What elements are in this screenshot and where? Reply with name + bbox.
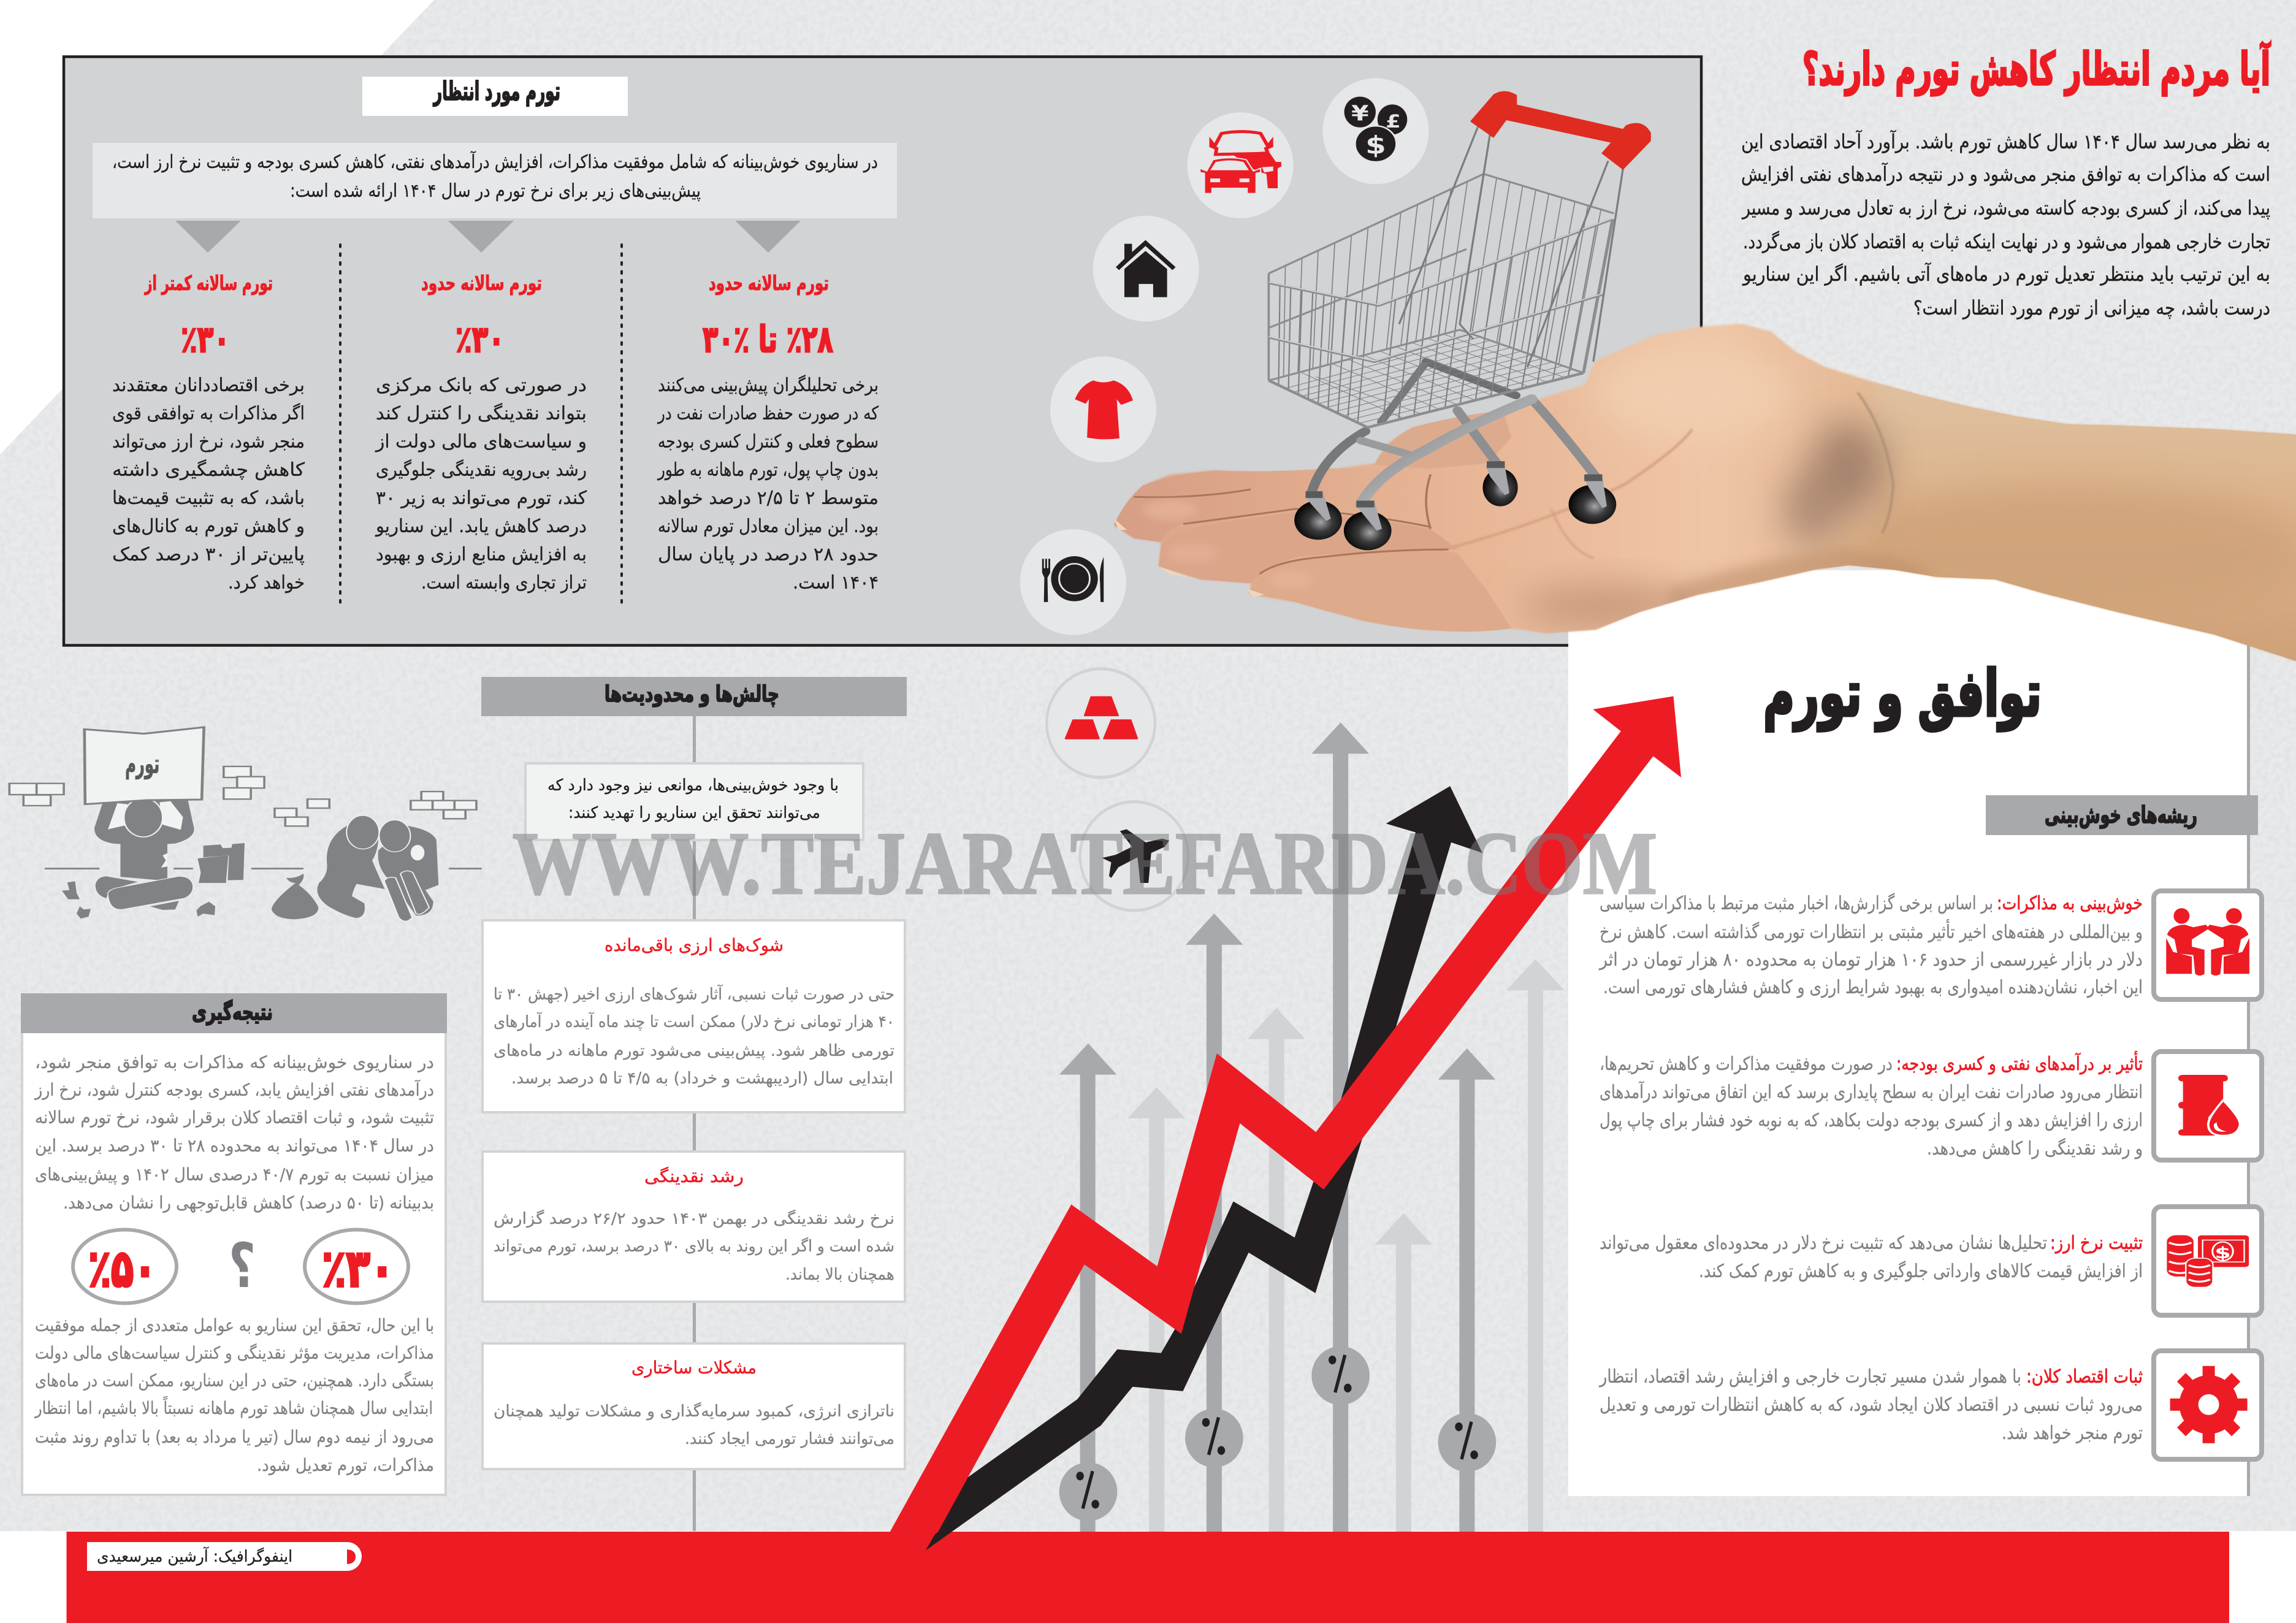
column: 28 to 30 percent: حدود ۲۸ درصد در پایان سال: [658, 544, 879, 565]
column: below 30 percent: تورم سالانه کمتر از: [144, 271, 273, 296]
bricks: [9, 766, 476, 826]
panel: expected inflation: [64, 56, 1701, 645]
section: challenges and limits: [481, 677, 907, 1531]
column: below 30 percent: پایین‌تر از ۳۰ درصد کمک: [112, 544, 305, 565]
column: below 30 percent: و کاهش تورم به کانال‌های: [112, 516, 305, 537]
section heading: [481, 677, 907, 716]
section intro box: با وجود خوش‌بینی‌ها، موانعی نیز وجود دارد که: [547, 776, 839, 795]
trash bag: [272, 874, 318, 919]
item: negotiation optimism: بر اساس برخی گزارش‌ها، اخبار مثبت مرتبط با مذاکرات سیاسی: [1600, 893, 1993, 914]
intro paragraph: [1741, 129, 2270, 319]
card: currency shocks: تورمی ظاهر شود. پیش‌بینی می‌شود تورم ماهانه در ماه‌های: [494, 1042, 894, 1060]
paragraph: conclusion first part: میزان نسبت به تورم ۴۰/۷ درصدی سال ۱۴۰۲ و پیش‌بینی‌های: [35, 1164, 434, 1185]
main title: deal and inflation: توافق و تورم: [1763, 656, 2042, 731]
card: currency shocks: شوک‌های ارزی باقی‌مانده: [605, 935, 784, 955]
red arrow: [880, 697, 1681, 1549]
paragraph: conclusion second part: [34, 1315, 434, 1475]
paragraph: conclusion first part: [34, 1052, 434, 1213]
item: macroeconomic stability: می‌رود ثبات نسبی در اقتصاد کلان ایجاد شود، که به کاهش انتظارات تورمی و تعدیل: [1600, 1394, 2143, 1416]
paragraph: conclusion first part: درآمدهای نفتی افزایش یابد، کسری بودجه کنترل شود، نرخ ارز: [34, 1080, 434, 1100]
section intro box: می‌توانند تحقق این سناریو را تهدید کنند:: [568, 804, 820, 822]
column: below 30 percent: کاهش چشمگیری داشته: [112, 459, 305, 481]
item: macroeconomic stability: تورم منجر خواهد شد.: [2002, 1423, 2143, 1444]
card: currency shocks: ابتدایی سال (اردیبهشت و خرداد) به ۴/۵ تا ۵ درصد برسد.: [511, 1069, 893, 1088]
paragraph: conclusion first part: تثبیت شود، و ثبات اقتصاد کلان برقرار شود، نرخ تورم سالانه: [35, 1107, 434, 1128]
icon card: coins and banknote: [2154, 1207, 2262, 1315]
item: negotiation optimism: دلار در بازار غیررسمی از حدود ۱۰۶ هزار تومان به محدوده ۸۰ هزار تومان در اثر: [1598, 949, 2143, 971]
section heading: چالش‌ها و محدودیت‌ها: [605, 682, 779, 707]
section heading: ریشه‌های خوش‌بینی: [2045, 801, 2197, 828]
cart wheels: [1294, 461, 1616, 550]
column: 28 to 30 percent: برخی تحلیلگران پیش‌بینی می‌کنند: [658, 375, 879, 396]
icon card: gear: [2154, 1351, 2262, 1459]
paragraph: conclusion second part: مذاکرات، مدیریت مؤثر نقدینگی و کنترل سیاست‌های مالی دولت: [35, 1343, 434, 1363]
intro text box: در سناریوی خوش‌بینانه که شامل موفقیت مذاکرات، افزایش درآمدهای نفتی، کاهش کسری بودجه و تثبیت نرخ ارز است،: [112, 151, 878, 173]
column: about 30 percent: تراز تجاری وابسته است.: [421, 572, 587, 594]
callout: 50 percent: [73, 1230, 177, 1304]
sign: [85, 727, 204, 804]
top-right intro: headline and text: [1741, 41, 2271, 319]
fingers: [1114, 411, 1511, 632]
card: structural problems: [482, 1343, 905, 1469]
column: 28 to 30 percent: سطوح فعلی و کنترل کسری بودجه: [658, 431, 879, 453]
credit pill: [87, 1542, 362, 1571]
section intro box: [525, 763, 863, 840]
column: about 30 percent: بتواند نقدینگی را کنترل کند: [376, 403, 587, 424]
column: below 30 percent: ٪۳۰: [181, 318, 230, 361]
cart undercarriage: [1311, 362, 1597, 505]
card: structural problems: می‌توانند فشار تورمی ایجاد کنند.: [685, 1430, 894, 1448]
intro paragraph: به نظر می‌رسد سال ۱۴۰۴ سال کاهش تورم باشد. برآورد آحاد اقتصادی این: [1741, 129, 2270, 153]
white section background: deal and inflation: [1568, 570, 2250, 1496]
shopping cart: [1268, 91, 1651, 550]
intro text box: [93, 143, 897, 218]
icon: shirt: [1050, 356, 1156, 462]
icon: gold bars: [1047, 669, 1155, 777]
pointer triangles: [175, 221, 801, 253]
column: 28 to 30 percent: بود. این میزان معادل تورم سالانه: [658, 516, 879, 537]
item: oil revenue and budget deficit: در صورت موفقیت مذاکرات و کاهش تحریم‌ها،: [1600, 1053, 1893, 1075]
item: macroeconomic stability: ثبات اقتصاد کلان:: [2026, 1366, 2143, 1388]
card: structural problems: ناترازی انرژی، کمبود سرمایه‌گذاری و مشکلات تولید همچنان: [494, 1402, 894, 1421]
question mark: ؟: [229, 1230, 256, 1302]
callout: 50 percent: ٪۵۰: [88, 1239, 156, 1299]
credit pill: اینفوگرافیک: آرشین میرسعیدی: [97, 1546, 292, 1566]
seated figure holding sign: [62, 798, 245, 918]
card: liquidity growth: رشد نقدینگی: [644, 1166, 744, 1186]
column: below 30 percent: خواهد کرد.: [228, 572, 305, 594]
icon: currency coins: $: [1365, 131, 1386, 160]
item: oil revenue and budget deficit: ارزی را افزایش دهد و از کسری بودجه دولت بکاهد، که به نوبه خود فشار برای چاپ پول: [1600, 1110, 2143, 1131]
paragraph: conclusion second part: ابتدایی سال همچنان شاهد تورم ماهانه نسبتاً بالا باشیم، اما انتظار: [34, 1396, 433, 1418]
item: negotiation optimism: خوش‌بینی به مذاکرات:: [1997, 893, 2143, 914]
cart basket wires: [1268, 127, 1623, 427]
column: below 30 percent: باشد، که به تثبیت قیمت‌ها: [112, 487, 305, 509]
column: below 30 percent: منجر شود، نرخ ارز می‌تواند: [112, 431, 305, 453]
item: negotiation optimism: و بین‌المللی در هفته‌های اخیر تأثیر مثبتی بر انتظارات تورمی گذاشته است. کاهش نرخ: [1600, 918, 2143, 943]
column: 28 to 30 percent: [657, 271, 879, 594]
paragraph: conclusion second part: با این حال، تحقق این سناریو به عوامل متعددی از جمله موفقیت: [35, 1315, 434, 1335]
percent badges: [1059, 1346, 1496, 1521]
column: about 30 percent: رشد بی‌رویه نقدینگی جلوگیری: [376, 459, 587, 481]
gray rising arrows chart background: [1047, 669, 1565, 1532]
illustration: people affected by inflation: [9, 727, 482, 921]
paragraph: conclusion first part: در سال ۱۴۰۴ می‌تواند به محدوده ۲۸ تا ۳۰ درصد برسد. این: [35, 1136, 434, 1156]
section: conclusion: [21, 993, 447, 1495]
light arrows: [1127, 959, 1565, 1532]
column: about 30 percent: و سیاست‌های مالی دولت از: [375, 431, 587, 453]
icon: currency coins: [1322, 78, 1428, 184]
card: liquidity growth: همچنان بالا بماند.: [785, 1266, 894, 1284]
column: about 30 percent: [375, 271, 587, 594]
item: macroeconomic stability: [1598, 1366, 2143, 1444]
item: exchange rate stabilization: تحلیل‌ها نشان می‌دهد که تثبیت نرخ دلار در محدوده‌ای معقول می‌تواند: [1600, 1232, 2047, 1254]
section heading: [1986, 795, 2258, 835]
column: 28 to 30 percent: ٪۲۸ تا ٪۳۰: [703, 318, 833, 361]
paragraph: conclusion first part: در سناریوی خوش‌بینانه که مذاکرات به توافق منجر شود،: [35, 1052, 434, 1072]
column: about 30 percent: به افزایش منابع ارزی و بهبود: [376, 544, 587, 565]
icon: house: [1093, 216, 1199, 321]
item: exchange rate stabilization: تثبیت نرخ ارز:: [2050, 1232, 2143, 1254]
card: liquidity growth: [482, 1151, 905, 1302]
column: about 30 percent: در صورتی که بانک مرکزی: [376, 375, 587, 396]
column: about 30 percent: ٪۳۰: [456, 318, 505, 361]
cart handle: [1470, 91, 1651, 170]
paragraph: conclusion second part: می‌رود از نیمه دوم سال (تیر یا مرداد به بعد) با تداوم روند مثبت: [35, 1427, 434, 1447]
website watermark: WWW.TEJARATEFARDA.COM: [513, 814, 1657, 913]
card: currency shocks: حتی در صورت ثبات نسبی، آثار شوک‌های ارزی اخیر (جهش ۳۰ تا: [494, 984, 894, 1004]
column: 28 to 30 percent: بدون چاپ پول، تورم ماهانه به طور: [657, 459, 879, 481]
item: negotiation optimism: [1598, 893, 2143, 998]
sign: تورم: [125, 749, 159, 779]
red footer bar: [66, 1532, 2229, 1623]
item: oil revenue and budget deficit: انتظار می‌رود صادرات نفت ایران به سطح پایداری برسد که این اتفاق می‌تواند درآمدهای: [1600, 1081, 2143, 1103]
item: oil revenue and budget deficit: [1600, 1050, 2143, 1159]
section: roots of optimism: [1598, 795, 2262, 1459]
column: 28 to 30 percent: متوسط ۲ تا ۲/۵ درصد خواهد: [658, 487, 879, 509]
item: exchange rate stabilization: از افزایش قیمت کالاهای وارداتی جلوگیری و به کاهش تورم کمک کند.: [1699, 1261, 2143, 1282]
paragraph: conclusion second part: بستگی دارد. همچنین، حتی در این سناریو، ممکن است در ماه‌های: [35, 1370, 434, 1391]
hand holding the shopping cart: [1114, 91, 2296, 687]
column: about 30 percent: درصد کاهش یابد. این سناریو: [375, 516, 587, 537]
card: liquidity growth: شده است و اگر این روند به بالای ۳۰ درصد برسد، تورم می‌تواند: [494, 1237, 894, 1256]
column: below 30 percent: برخی اقتصاددانان معتقدند: [112, 375, 305, 396]
item: exchange rate stabilization: [1600, 1232, 2143, 1282]
rising trend arrows: [880, 697, 1681, 1551]
intro text box: پیش‌بینی‌های زیر برای نرخ تورم در سال ۱۴۰۴ ارائه شده است:: [290, 180, 701, 202]
black arrow: [926, 786, 1482, 1551]
column: below 30 percent: اگر مذاکرات به توافقی قوی: [112, 403, 305, 424]
section heading: نتیجه‌گیری: [192, 999, 273, 1025]
column: about 30 percent: کند، تورم می‌تواند به زیر ۳۰: [376, 487, 587, 509]
callout: 30 percent: [305, 1230, 408, 1304]
item: macroeconomic stability: با هموار شدن مسیر تجارت خارجی و افزایش رشد اقتصاد، انتظار: [1598, 1366, 2021, 1388]
card: structural problems: مشکلات ساختاری: [631, 1358, 757, 1378]
icon card: oil barrel: [2154, 1052, 2262, 1160]
card: currency shocks: [482, 920, 905, 1112]
dark arrows: [1059, 722, 1495, 1532]
item: negotiation optimism: این اخبار، نشان‌دهنده امیدواری به بهبود شرایط ارزی و کاهش فشارهای تورمی است.: [1603, 977, 2143, 998]
icon: currency coins: £: [1386, 111, 1401, 132]
icon: currency coins: ¥: [1351, 101, 1369, 126]
icon: plate and cutlery: [1020, 529, 1126, 635]
callout: 30 percent: ٪۳۰: [322, 1239, 394, 1299]
column: below 30 percent: [112, 271, 305, 594]
card: liquidity growth: نرخ رشد نقدینگی در بهمن ۱۴۰۳ حدود ۲۶/۲ درصد گزارش: [494, 1209, 894, 1228]
icon card: coins and banknote: $: [2214, 1243, 2231, 1262]
huddled couple: [317, 815, 438, 921]
icon: cars: [1188, 112, 1294, 218]
section heading: [21, 993, 447, 1033]
column: 28 to 30 percent: که در صورت حفظ صادرات نفت در: [657, 403, 879, 424]
panel heading: expected inflation: [362, 76, 628, 116]
spending category icons: [1020, 78, 1428, 635]
item: oil revenue and budget deficit: و رشد نقدینگی را کاهش می‌دهد.: [1927, 1138, 2143, 1159]
paragraph: conclusion second part: مذاکرات، تورم تعدیل شود.: [257, 1455, 434, 1475]
card: currency shocks: ۴۰ هزار تومانی نرخ دلار) ممکن است تا چند ماه آینده در آمارهای: [494, 1012, 894, 1031]
icon card: negotiating people: [2154, 891, 2262, 999]
paragraph: conclusion first part: بدبینانه (تا ۵۰ درصد) کاهش قابل‌توجهی را نشان می‌دهد.: [63, 1193, 434, 1213]
ground line: [45, 866, 482, 871]
panel heading: expected inflation: تورم مورد انتظار: [433, 76, 560, 107]
column: 28 to 30 percent: تورم سالانه حدود: [709, 271, 829, 296]
hand photo approximation: [1114, 324, 2296, 687]
icon: airplane: [1080, 802, 1188, 911]
item: oil revenue and budget deficit: تأثیر بر درآمدهای نفتی و کسری بودجه:: [1896, 1050, 2143, 1075]
column: 28 to 30 percent: ۱۴۰۴ است.: [793, 572, 879, 594]
column: about 30 percent: تورم سالانه حدود: [421, 271, 542, 296]
